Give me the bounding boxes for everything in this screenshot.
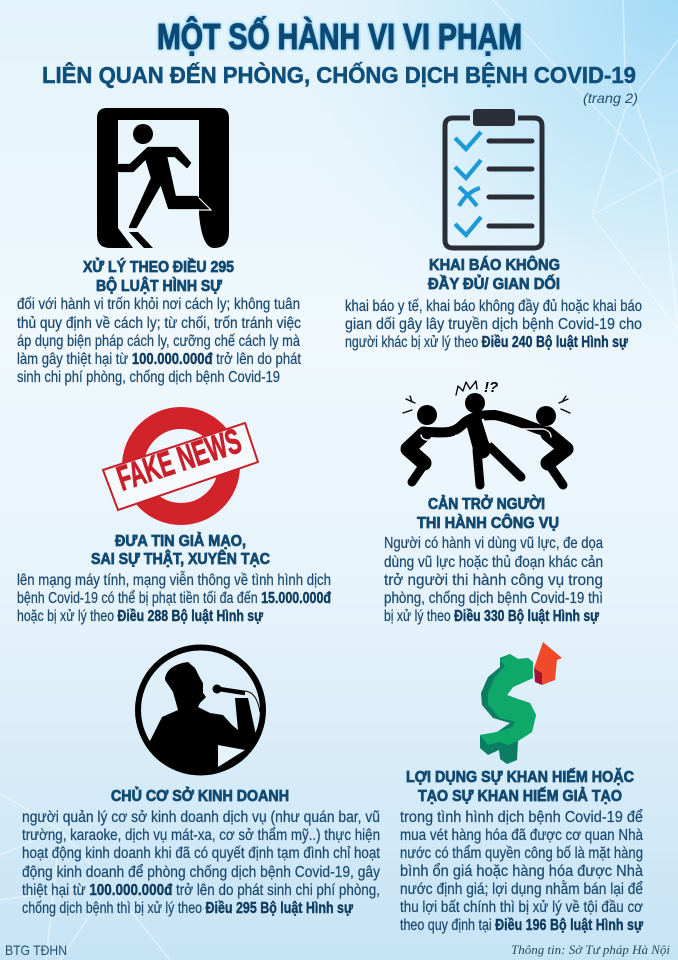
icon: people struggling — [403, 379, 570, 485]
text block — [345, 298, 642, 351]
heading: XỬ LÝ THEO ĐIỀU 295 — [83, 258, 234, 276]
text block — [400, 809, 644, 934]
heading — [406, 769, 634, 805]
text block: phòng, chống dịch bệnh Covid-19 thì — [384, 590, 603, 607]
text block: người quản lý cơ sở kinh doanh dịch vụ (như quán bar, vũ — [22, 809, 380, 826]
title: LIÊN QUAN ĐẾN PHÒNG, CHỐNG DỊCH BỆNH COVID-19 — [42, 61, 636, 88]
text block: động kinh doanh để phòng chống dịch bệnh Covid-19, gây — [22, 864, 380, 881]
text block: trong tình hình dịch bệnh Covid-19 để — [400, 809, 643, 826]
text block: làm gây thiệt hại từ 100.000.000đ trở lên do phát — [17, 351, 302, 368]
icon: fake news stamp — [103, 418, 258, 514]
icon: clipboard checklist — [445, 109, 542, 248]
heading: CẢN TRỞ NGƯỜI — [428, 495, 545, 513]
panel: quarantine escape — [17, 108, 302, 386]
text block: lên mạng máy tính, mạng viễn thông về tình hình dịch — [17, 572, 331, 589]
text block: dùng vũ lực hoặc thủ đoạn khác cản — [384, 554, 603, 571]
heading — [91, 533, 270, 568]
text block: bệnh Covid-19 có thể bị phạt tiền tối đa đến 15.000.000đ — [17, 590, 331, 607]
text block: thủ quy định về cách ly; từ chối, trốn tránh việc — [17, 315, 301, 332]
text block — [17, 572, 331, 625]
heading: SAI SỰ THẬT, XUYÊN TẠC — [91, 550, 270, 568]
text block — [22, 809, 381, 917]
text block: người khác bị xử lý theo Điều 240 Bộ luật Hình sự — [345, 334, 629, 351]
text block: đối với hành vi trốn khỏi nơi cách ly; không tuân — [17, 296, 300, 313]
heading: ĐẦY ĐỦ/ GIAN DỐI — [428, 275, 560, 293]
heading: TẠO SỰ KHAN HIẾM GIẢ TẠO — [418, 788, 622, 805]
text block: hoặc bị xử lý theo Điều 288 Bộ luật Hình sự — [17, 608, 264, 625]
page note: (trang 2) — [583, 90, 638, 106]
text block: nước định giá; lợi dụng nhằm bán lại để — [400, 881, 643, 898]
heading — [428, 256, 560, 293]
icon: singer in circle — [138, 648, 270, 780]
text block: mua vét hàng hóa đã được cơ quan Nhà — [400, 827, 643, 844]
text block — [17, 296, 302, 386]
heading: LỢI DỤNG SỰ KHAN HIẾM HOẶC — [406, 769, 634, 786]
text block: áp dụng biện pháp cách ly, cưỡng chế cách ly mà — [17, 333, 300, 350]
panel: fake news — [17, 418, 331, 625]
heading: CHỦ CƠ SỞ KINH DOANH — [111, 787, 289, 805]
icon: people struggling: !? — [484, 379, 498, 396]
panel: scarcity — [400, 642, 644, 934]
text block — [384, 535, 603, 625]
heading — [83, 258, 234, 295]
text block: hoạt động kinh doanh khi đã có quyết định tạm đình chỉ hoạt — [22, 845, 381, 862]
panel: obstructing officers — [384, 379, 603, 625]
heading: THI HÀNH CÔNG VỤ — [417, 514, 559, 532]
icon: green dollar with red arrow — [480, 642, 562, 764]
title — [42, 15, 636, 88]
heading: BỘ LUẬT HÌNH SỰ — [96, 277, 222, 295]
text block: gian dối gây lây truyền dịch bệnh Covid-19 cho — [345, 316, 642, 333]
icon: fake news stamp: FAKE NEWS — [112, 421, 246, 499]
icon: exit runner — [97, 108, 229, 248]
heading: ĐƯA TIN GIẢ MẠO, — [115, 533, 246, 550]
text block: Người có hành vi dùng vũ lực, đe dọa — [384, 535, 603, 552]
text block: bị xử lý theo Điều 330 Bộ luật Hình sự — [384, 608, 600, 625]
text block: theo quy định tại Điều 196 Bộ luật Hình sự — [400, 917, 644, 934]
text block: trường, karaoke, dịch vụ mát-xa, cơ sở thẩm mỹ..) thực hiện — [22, 827, 380, 844]
text block: thu lợi bất chính thì bị xử lý về tội đầu cơ — [400, 899, 643, 916]
title: MỘT SỐ HÀNH VI VI PHẠM — [157, 15, 522, 57]
text block: thiệt hại từ 100.000.000đ trở lên do phát sinh chi phí phòng, — [22, 882, 380, 899]
footer source: Thông tin: Sở Tư pháp Hà Nội — [511, 943, 671, 957]
heading: KHAI BÁO KHÔNG — [429, 256, 560, 274]
footer credit: BTG TĐHN — [5, 942, 67, 958]
text block: sinh chi phí phòng, chống dịch bệnh Covid-19 — [17, 369, 280, 386]
panel: business owner — [22, 648, 381, 917]
text block: bình ổn giá hoặc hàng hóa được Nhà — [400, 863, 643, 880]
text block: chống dịch bệnh thì bị xử lý theo Điều 295 Bộ luật Hình sự — [22, 900, 354, 917]
heading — [417, 495, 559, 532]
text block: trở người thi hành công vụ trong — [384, 572, 603, 589]
panel: false declaration — [345, 109, 642, 351]
